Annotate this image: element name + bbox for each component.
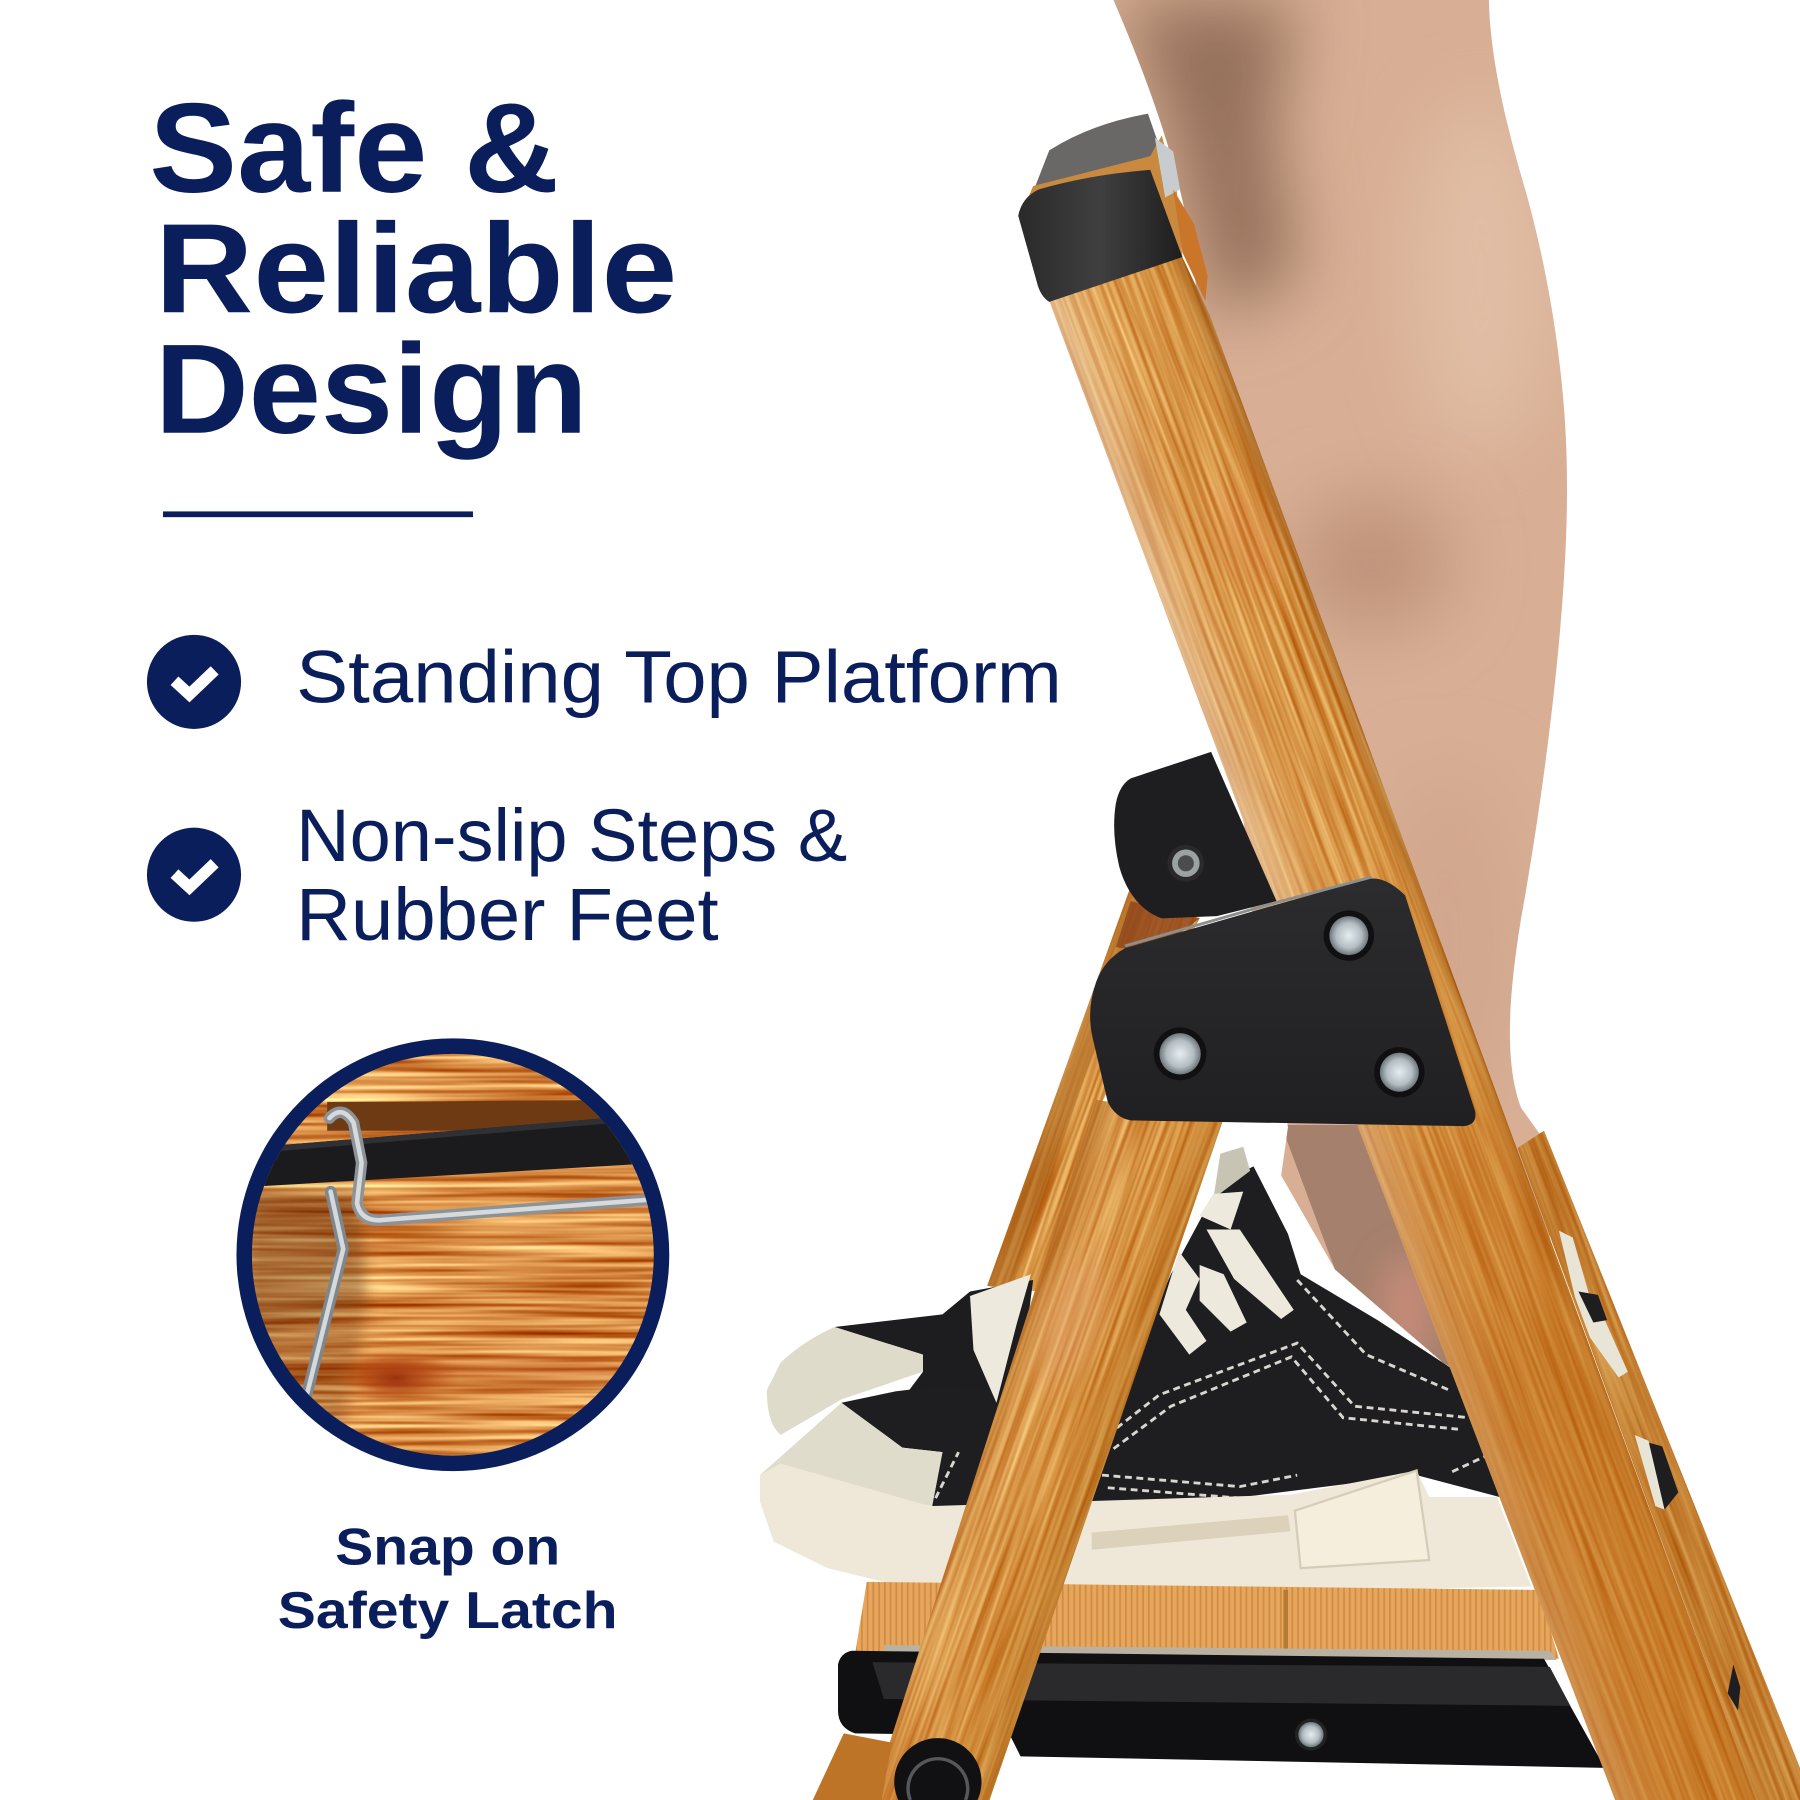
shoes (760, 1147, 1531, 1605)
leg (1102, 0, 1584, 1389)
feature: standing top platform (147, 635, 1062, 729)
front shoe toe cap (760, 1403, 942, 1506)
rear shoe (767, 1280, 1033, 1435)
stitching (936, 1280, 1487, 1498)
inset caption: Snap on (335, 1518, 560, 1576)
side wood piece (1173, 189, 1208, 301)
wood band (1019, 135, 1182, 257)
main front rail (1049, 257, 1756, 1800)
inset caption (278, 1518, 618, 1639)
black step frame (838, 1651, 1605, 1768)
icon: check badge (147, 828, 241, 922)
screw (1324, 910, 1374, 961)
front-left rail (871, 1100, 1223, 1800)
rear hinge plate (1114, 752, 1277, 918)
icon: check badge (147, 635, 241, 729)
rear outer rail (1518, 1131, 1800, 1800)
lower rear rail stub (813, 1733, 892, 1800)
rear leg rail (987, 886, 1200, 1291)
feature text: Non-slip Steps & (296, 793, 847, 877)
foot pivot cap (894, 1738, 982, 1800)
main hinge plate (1090, 877, 1475, 1126)
feature text (296, 793, 847, 956)
title: Safe & (149, 78, 559, 220)
latch bracket (1155, 138, 1180, 197)
wood tread (855, 1582, 1559, 1659)
front shoe upper (841, 1166, 1504, 1515)
lace and shoe through the gap (1559, 1231, 1628, 1378)
feature text: Standing Top Platform (296, 635, 1062, 719)
title (149, 78, 677, 461)
sole (760, 1464, 1531, 1605)
screw (1154, 1027, 1207, 1080)
metal lip (884, 1645, 1557, 1660)
top platform (1018, 114, 1208, 302)
cap front (1018, 170, 1182, 302)
title: Reliable (155, 198, 677, 340)
feature: non-slip steps and rubber feet (147, 793, 847, 956)
screw (1374, 1047, 1425, 1097)
inset caption: Safety Latch (278, 1581, 618, 1639)
cap top surface (1033, 114, 1159, 192)
bottom step (838, 1582, 1605, 1768)
latch wire (307, 1112, 650, 1396)
screw (1295, 1718, 1327, 1751)
title: Design (155, 319, 588, 461)
inset: safety latch close-up (236, 1038, 669, 1471)
sole panel (1295, 1471, 1429, 1568)
feature text: Rubber Feet (296, 872, 719, 956)
laces (970, 1147, 1294, 1403)
